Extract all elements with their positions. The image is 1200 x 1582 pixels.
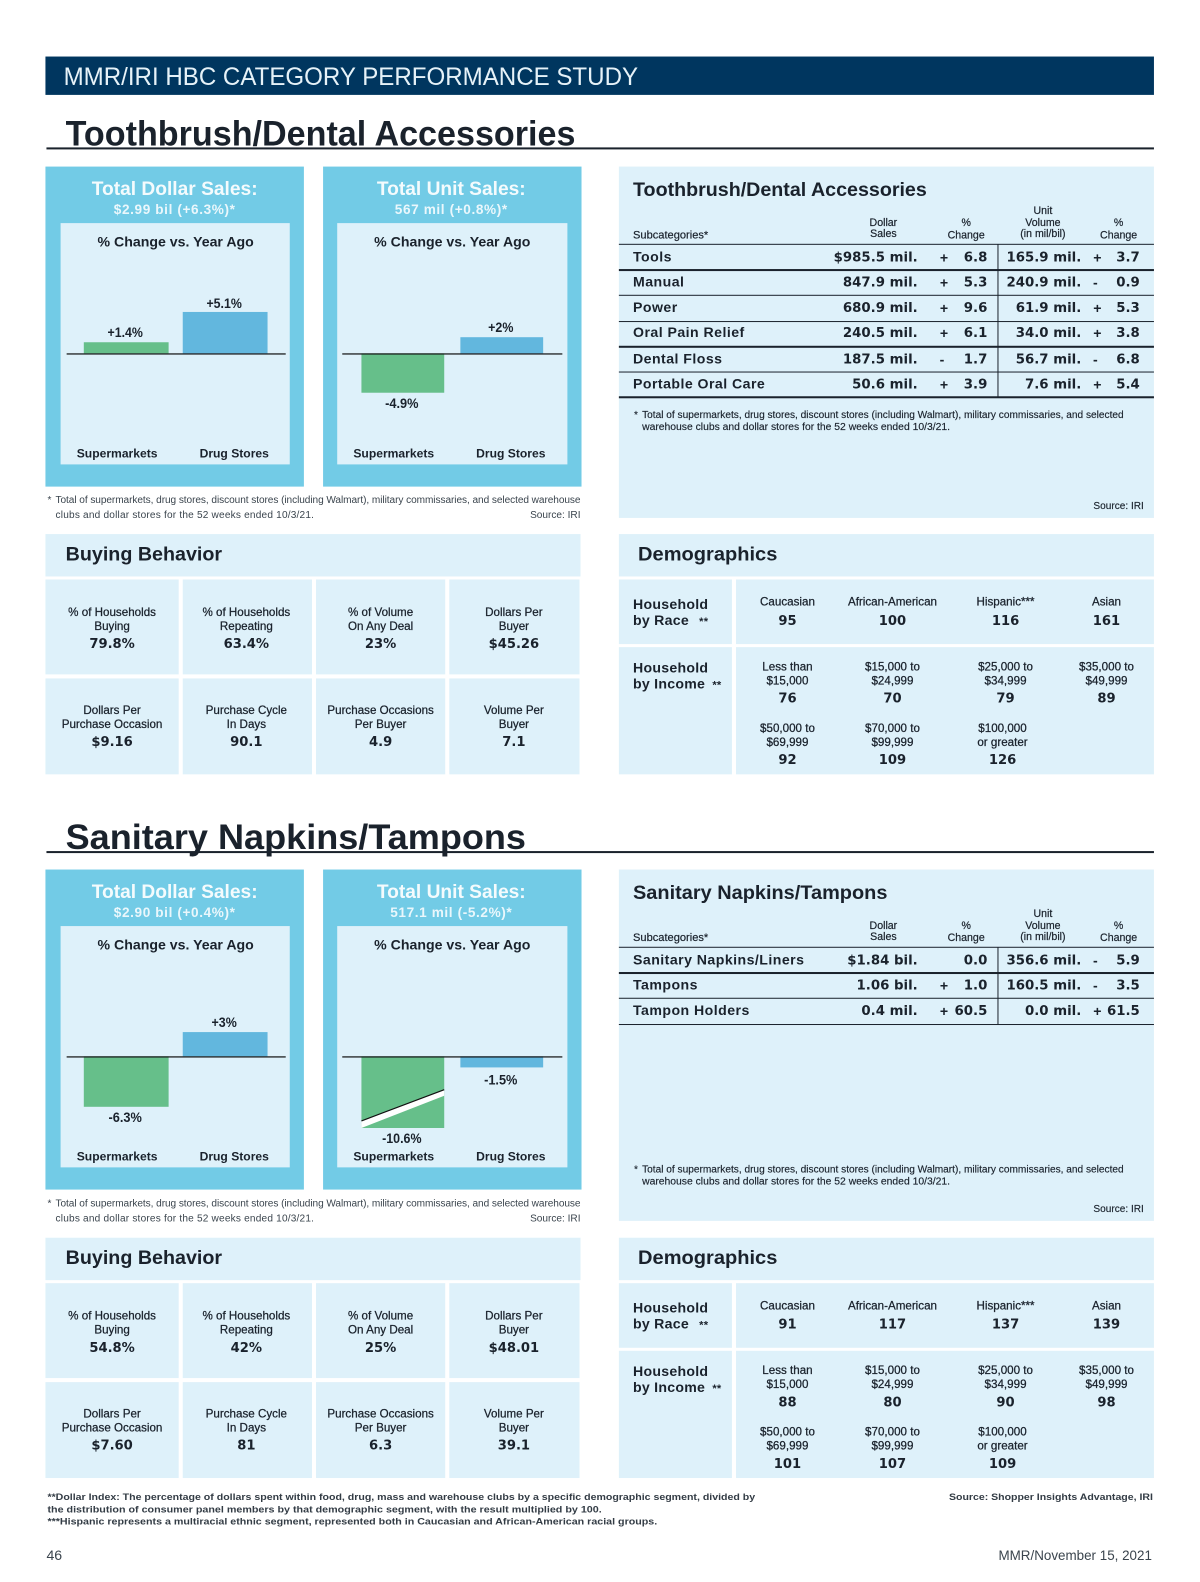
panel: buying behavior: In Days xyxy=(227,718,266,731)
panel: demographics: 89 xyxy=(1097,692,1116,707)
panel: buying behavior: Purchase Occasion xyxy=(62,718,162,731)
panel: buying behavior: Dollars Per xyxy=(83,1407,141,1420)
panel: demographics: $35,000 to xyxy=(1079,660,1134,673)
panel: buying behavior xyxy=(45,1238,581,1478)
panel: demographics: Less than xyxy=(762,660,813,673)
panel: demographics: $15,000 xyxy=(766,674,808,687)
panel: buying behavior: 4.9 xyxy=(369,735,392,750)
table panel: subcategories: + xyxy=(940,325,948,341)
footnotes: dollar index and Hispanic definition: ***Hispanic represents a multiracial ethnic segment, represented both in Caucasian and African-American racial groups. xyxy=(47,1516,657,1527)
table panel: subcategories xyxy=(619,870,1154,1221)
table panel: subcategories: Tools xyxy=(633,248,672,264)
footnote: sales panels: Source: IRI xyxy=(530,510,581,521)
panel: total dollar sales xyxy=(45,870,304,1190)
bar chart: dollar sales change: +1.4% xyxy=(108,325,143,340)
panel: demographics: Asian xyxy=(1092,1299,1121,1312)
table panel: subcategories: % xyxy=(961,217,971,229)
table panel: subcategories: 9.6 xyxy=(964,301,987,316)
panel: demographics: Hispanic*** xyxy=(977,1299,1035,1312)
panel: buying behavior: 54.8% xyxy=(89,1341,135,1356)
source credit: Source: Shopper Insights Advantage, IRI xyxy=(949,1492,1153,1503)
bar chart: unit sales change: -4.9% xyxy=(385,396,418,411)
panel: demographics: 100 xyxy=(879,614,906,629)
panel: demographics: 92 xyxy=(778,753,797,768)
panel: buying behavior: % of Households xyxy=(68,1310,156,1323)
panel: demographics: $70,000 to xyxy=(865,1426,920,1439)
table panel: subcategories: 3.9 xyxy=(964,378,987,393)
table panel: subcategories: + xyxy=(940,377,948,393)
panel: buying behavior: On Any Deal xyxy=(348,1324,413,1337)
table panel: subcategories: + xyxy=(1093,1003,1102,1019)
panel: demographics: $100,000 xyxy=(978,722,1027,735)
panel: buying behavior: On Any Deal xyxy=(348,620,413,633)
table panel: subcategories: + xyxy=(940,275,948,291)
table panel: subcategories: + xyxy=(940,300,948,316)
table panel: subcategories: 34.0 mil. xyxy=(1016,326,1081,341)
table panel: subcategories: Sanitary Napkins/Liners xyxy=(633,951,804,967)
table panel: subcategories: $985.5 mil. xyxy=(834,250,918,265)
panel: demographics: Household xyxy=(633,1363,708,1379)
panel: demographics: 116 xyxy=(992,614,1019,629)
table panel: subcategories: Manual xyxy=(633,274,684,290)
panel: demographics: $69,999 xyxy=(766,1440,808,1453)
table panel: subcategories: Total of supermarkets, drug stores, discount stores (including Walmart), military commissaries, and selected xyxy=(642,410,1124,421)
panel: total dollar sales: Total Dollar Sales: xyxy=(92,882,258,903)
table panel: subcategories: 0.0 xyxy=(964,953,987,968)
table panel: subcategories: Volume xyxy=(1025,920,1061,932)
table panel: subcategories: Portable Oral Care xyxy=(633,376,765,392)
table panel: subcategories: 0.0 mil. xyxy=(1025,1004,1081,1019)
panel: buying behavior: Purchase Occasions xyxy=(327,1407,434,1420)
bar chart: unit sales change: Drug Stores xyxy=(476,446,546,460)
footnote: sales panels: Total of supermarkets, drug stores, discount stores (including Walmart), military commissaries, and selected warehouse xyxy=(56,1198,581,1209)
bar chart: dollar sales change: Supermarkets xyxy=(77,1149,158,1163)
table panel: subcategories: 160.5 mil. xyxy=(1006,979,1081,994)
panel: buying behavior: 6.3 xyxy=(369,1439,392,1454)
panel: buying behavior: Per Buyer xyxy=(355,718,407,731)
table panel: subcategories: 6.1 xyxy=(964,326,987,341)
table panel: subcategories: Dollar xyxy=(870,920,898,932)
panel: demographics: $99,999 xyxy=(871,1440,913,1453)
panel: demographics: 109 xyxy=(879,753,906,768)
bar chart: unit sales change: Supermarkets xyxy=(353,446,434,460)
footnote: sales panels: * xyxy=(47,495,51,506)
table panel: subcategories: * xyxy=(634,410,638,421)
panel: buying behavior: Buyer xyxy=(499,620,529,633)
bar chart: dollar sales change xyxy=(67,1015,286,1163)
panel: demographics: $50,000 to xyxy=(760,1426,815,1439)
panel: buying behavior: $45.26 xyxy=(489,637,539,652)
panel: total dollar sales: $2.99 bil (+6.3%)* xyxy=(114,202,236,217)
panel: buying behavior: Buying Behavior xyxy=(66,1248,223,1269)
footnote: sales panels: Source: IRI xyxy=(530,1214,581,1225)
panel: buying behavior: 7.1 xyxy=(502,735,526,750)
panel: buying behavior: Buying Behavior xyxy=(66,544,223,565)
table panel: subcategories: % xyxy=(1114,217,1124,229)
table panel: subcategories: 60.5 xyxy=(955,1004,987,1019)
panel: buying behavior: 90.1 xyxy=(230,735,263,750)
table panel: subcategories: 6.8 xyxy=(964,250,987,265)
panel: buying behavior: Buyer xyxy=(499,1422,529,1435)
table panel: subcategories: 7.6 mil. xyxy=(1025,378,1081,393)
panel: buying behavior: 23% xyxy=(365,637,396,652)
panel: demographics: African-American xyxy=(848,1299,937,1312)
table panel: subcategories: + xyxy=(1093,300,1102,316)
panel: demographics: $24,999 xyxy=(871,1378,913,1391)
panel: demographics: $49,999 xyxy=(1086,674,1127,687)
table panel: subcategories: Tampon Holders xyxy=(633,1002,750,1018)
panel: demographics: 90 xyxy=(996,1395,1015,1410)
bar chart: dollar sales change xyxy=(67,296,286,460)
table panel: subcategories: * xyxy=(634,1164,638,1175)
panel: total unit sales: Total Unit Sales: xyxy=(377,179,526,200)
bar chart: dollar sales change: +5.1% xyxy=(206,296,242,311)
panel: demographics: $70,000 to xyxy=(865,722,920,735)
table panel: subcategories: - xyxy=(1093,351,1098,367)
panel: demographics: $34,999 xyxy=(985,1378,1027,1391)
table panel: subcategories: 56.7 mil. xyxy=(1016,352,1081,367)
panel: buying behavior: Volume Per xyxy=(484,1407,544,1420)
table panel: subcategories: Subcategories* xyxy=(633,932,709,944)
banner xyxy=(45,57,1154,95)
table panel: subcategories: + xyxy=(940,249,948,265)
bar chart: dollar sales change: +3% xyxy=(212,1015,237,1030)
panel: buying behavior: Dollars Per xyxy=(485,606,543,619)
panel: buying behavior: Repeating xyxy=(220,1324,273,1337)
panel: demographics: by Race ** xyxy=(633,1316,709,1332)
panel: demographics: 95 xyxy=(778,614,797,629)
table panel: subcategories: - xyxy=(1093,978,1098,994)
panel: buying behavior: 79.8% xyxy=(89,637,135,652)
table panel: subcategories: 3.5 xyxy=(1116,979,1140,994)
table panel: subcategories: $1.84 bil. xyxy=(847,953,918,968)
table panel: subcategories: 187.5 mil. xyxy=(843,352,918,367)
table panel: subcategories: 240.9 mil. xyxy=(1006,276,1081,291)
panel: demographics: Asian xyxy=(1092,596,1121,609)
panel: buying behavior: Buying xyxy=(94,1324,130,1337)
table panel: subcategories: Tampons xyxy=(633,977,698,993)
panel: buying behavior: Purchase Cycle xyxy=(206,1407,287,1420)
table panel: subcategories: - xyxy=(1093,952,1098,968)
panel: demographics: 88 xyxy=(778,1395,797,1410)
panel: demographics: by Income ** xyxy=(633,676,722,692)
publication date: MMR/November 15, 2021 xyxy=(998,1547,1152,1563)
panel: total dollar sales: Total Dollar Sales: xyxy=(92,179,258,200)
table panel: subcategories: 1.06 bil. xyxy=(857,979,918,994)
panel: demographics xyxy=(619,534,1154,774)
bar chart: unit sales change xyxy=(342,320,562,460)
table panel: subcategories: 1.7 xyxy=(964,352,987,367)
panel: demographics: or greater xyxy=(977,736,1028,749)
panel: demographics: Caucasian xyxy=(760,596,815,609)
panel: demographics: $49,999 xyxy=(1086,1378,1127,1391)
footnotes: dollar index and Hispanic definition: **Dollar Index: The percentage of dollars spent within food, drug, mass and warehouse clubs by a specific demographic segment, divided by xyxy=(47,1492,756,1503)
table panel: subcategories: 0.4 mil. xyxy=(861,1004,918,1019)
table panel: subcategories: 5.9 xyxy=(1116,953,1140,968)
footnotes: dollar index and Hispanic definition: the distribution of consumer panel members by that demographic segment, with the result multiplied by 100. xyxy=(47,1504,602,1515)
bar chart: unit sales change: -10.6% xyxy=(382,1131,422,1146)
table panel: subcategories: Subcategories* xyxy=(633,229,709,241)
panel: buying behavior: % of Households xyxy=(202,606,290,619)
panel: buying behavior: Purchase Occasions xyxy=(327,704,434,717)
footnote: sales panels: clubs and dollar stores for the 52 weeks ended 10/3/21. xyxy=(56,510,314,521)
panel: demographics: 76 xyxy=(778,692,797,707)
panel: demographics: $24,999 xyxy=(871,674,913,687)
panel: demographics: Household xyxy=(633,659,708,675)
table panel: subcategories: - xyxy=(940,351,945,367)
table panel: subcategories: 680.9 mil. xyxy=(843,301,918,316)
banner: MMR/IRI HBC CATEGORY PERFORMANCE STUDY xyxy=(64,63,638,91)
panel: buying behavior: % of Volume xyxy=(348,1310,413,1323)
table panel: subcategories: 1.0 xyxy=(964,979,987,994)
panel: demographics: $35,000 to xyxy=(1079,1364,1134,1377)
table panel: subcategories: Unit xyxy=(1033,908,1052,920)
table panel: subcategories: 356.6 mil. xyxy=(1006,953,1081,968)
footnotes: dollar index and Hispanic definition xyxy=(47,1492,756,1527)
section title: Toothbrush/Dental Accessories: Toothbrush/Dental Accessories xyxy=(66,114,575,153)
table panel: subcategories: (in mil/bil) xyxy=(1020,228,1066,240)
panel: demographics: 117 xyxy=(879,1318,906,1333)
panel: demographics: 101 xyxy=(774,1457,801,1472)
panel: buying behavior xyxy=(45,534,581,774)
table panel: subcategories: Unit xyxy=(1033,205,1052,217)
panel: demographics: Hispanic*** xyxy=(977,596,1035,609)
panel: demographics: $15,000 xyxy=(766,1378,808,1391)
panel: buying behavior: $7.60 xyxy=(91,1439,133,1454)
table panel: subcategories: 50.6 mil. xyxy=(852,378,918,393)
table panel: subcategories: Volume xyxy=(1025,217,1061,229)
panel: demographics: $99,999 xyxy=(871,736,913,749)
panel: buying behavior: $48.01 xyxy=(489,1341,539,1356)
panel: demographics: $34,999 xyxy=(985,674,1027,687)
panel: demographics: Caucasian xyxy=(760,1299,815,1312)
panel: demographics: $50,000 to xyxy=(760,722,815,735)
bar chart: dollar sales change: -6.3% xyxy=(109,1110,142,1125)
panel: demographics: 137 xyxy=(992,1318,1019,1333)
panel: demographics: 139 xyxy=(1093,1318,1120,1333)
table panel: subcategories: + xyxy=(940,1003,948,1019)
table panel: subcategories: + xyxy=(1093,377,1102,393)
table panel: subcategories: Change xyxy=(1100,229,1137,241)
panel: buying behavior: 42% xyxy=(231,1341,262,1356)
page number: 46 xyxy=(46,1547,62,1563)
panel: buying behavior: Repeating xyxy=(220,620,273,633)
bar chart: unit sales change: Drug Stores xyxy=(476,1149,546,1163)
panel: demographics: $15,000 to xyxy=(865,660,920,673)
panel: demographics: Demographics xyxy=(638,1248,777,1269)
panel: buying behavior: Purchase Cycle xyxy=(206,704,287,717)
table panel: subcategories: + xyxy=(940,978,948,994)
table panel: subcategories: Change xyxy=(1100,932,1137,944)
panel: demographics: 98 xyxy=(1097,1395,1116,1410)
bar chart: unit sales change xyxy=(342,1056,562,1163)
table panel: subcategories: - xyxy=(1093,275,1098,291)
panel: buying behavior: $9.16 xyxy=(91,735,133,750)
table panel: subcategories: Dental Floss xyxy=(633,350,722,366)
panel: total unit sales: 517.1 mil (-5.2%)* xyxy=(390,905,512,920)
panel: demographics: 161 xyxy=(1093,614,1120,629)
panel: buying behavior: 25% xyxy=(365,1341,396,1356)
section title: Sanitary Napkins/Tampons: Sanitary Napkins/Tampons xyxy=(66,818,526,857)
panel: demographics: $100,000 xyxy=(978,1426,1027,1439)
table panel: subcategories: 0.9 xyxy=(1116,276,1140,291)
panel: demographics: $25,000 to xyxy=(978,1364,1033,1377)
bar chart: dollar sales change: Supermarkets xyxy=(77,446,158,460)
panel: total dollar sales: $2.90 bil (+0.4%)* xyxy=(114,905,236,920)
table panel: subcategories: + xyxy=(1093,325,1102,341)
table panel: subcategories: Sales xyxy=(870,228,897,240)
table panel: subcategories: Power xyxy=(633,299,678,315)
panel: demographics: Household xyxy=(633,1299,708,1315)
table panel: subcategories: warehouse clubs and dollar stores for the 52 weeks ended 10/3/21. xyxy=(641,1177,950,1188)
panel: demographics: 107 xyxy=(879,1457,906,1472)
table panel: subcategories: % xyxy=(961,920,971,932)
panel: buying behavior: % of Households xyxy=(202,1310,290,1323)
table panel: subcategories: Oral Pain Relief xyxy=(633,324,745,340)
panel: buying behavior: % of Households xyxy=(68,606,156,619)
panel: total unit sales: % Change vs. Year Ago xyxy=(374,936,531,952)
panel: demographics: $15,000 to xyxy=(865,1364,920,1377)
table panel: subcategories: Change xyxy=(948,932,985,944)
panel: buying behavior: Buyer xyxy=(499,1324,529,1337)
table panel: subcategories: Total of supermarkets, drug stores, discount stores (including Walmart), military commissaries, and selected xyxy=(642,1164,1124,1175)
table panel: subcategories: 3.8 xyxy=(1116,326,1140,341)
panel: demographics: or greater xyxy=(977,1440,1028,1453)
panel: demographics xyxy=(619,1238,1154,1478)
panel: total unit sales xyxy=(323,870,582,1190)
table panel: subcategories: 61.9 mil. xyxy=(1016,301,1081,316)
table panel: subcategories: 61.5 xyxy=(1107,1004,1140,1019)
bar chart: dollar sales change: Drug Stores xyxy=(200,446,269,460)
panel: buying behavior: In Days xyxy=(227,1422,266,1435)
table panel: subcategories: Sales xyxy=(870,931,897,943)
panel: buying behavior: Per Buyer xyxy=(355,1422,407,1435)
panel: total dollar sales xyxy=(45,167,304,487)
panel: demographics: $69,999 xyxy=(766,736,808,749)
panel: demographics: 70 xyxy=(883,692,902,707)
footnote: sales panels: * xyxy=(47,1198,51,1209)
table panel: subcategories xyxy=(619,167,1154,518)
panel: buying behavior: Purchase Occasion xyxy=(62,1422,162,1435)
bar chart: unit sales change: Supermarkets xyxy=(353,1149,434,1163)
panel: demographics: 79 xyxy=(996,692,1015,707)
table panel: subcategories: Source: IRI xyxy=(1093,501,1144,512)
panel: total unit sales: % Change vs. Year Ago xyxy=(374,233,531,249)
table panel: subcategories: 5.3 xyxy=(1116,301,1140,316)
table panel: subcategories: warehouse clubs and dollar stores for the 52 weeks ended 10/3/21. xyxy=(641,422,950,433)
table panel: subcategories: % xyxy=(1114,920,1124,932)
panel: buying behavior: Dollars Per xyxy=(485,1310,543,1323)
table panel: subcategories: Dollar xyxy=(870,217,898,229)
panel: total dollar sales: % Change vs. Year Ago xyxy=(98,233,254,249)
footnote: sales panels: clubs and dollar stores for the 52 weeks ended 10/3/21. xyxy=(56,1214,314,1225)
panel: demographics: 91 xyxy=(778,1318,797,1333)
bar chart: unit sales change: -1.5% xyxy=(484,1073,517,1088)
panel: demographics: 126 xyxy=(989,753,1016,768)
table panel: subcategories: 165.9 mil. xyxy=(1006,250,1081,265)
panel: demographics: African-American xyxy=(848,596,937,609)
panel: total unit sales: 567 mil (+0.8%)* xyxy=(395,202,508,217)
panel: demographics: Demographics xyxy=(638,544,777,565)
panel: demographics: Household xyxy=(633,596,708,612)
table panel: subcategories: 5.3 xyxy=(964,276,987,291)
table panel: subcategories: 3.7 xyxy=(1116,250,1140,265)
panel: buying behavior: % of Volume xyxy=(348,606,413,619)
table panel: subcategories: 240.5 mil. xyxy=(843,326,918,341)
footnote: sales panels: Total of supermarkets, drug stores, discount stores (including Walmart), military commissaries, and selected warehouse xyxy=(56,495,581,506)
table panel: subcategories: Sanitary Napkins/Tampons xyxy=(633,883,887,904)
panel: buying behavior: 39.1 xyxy=(498,1439,530,1454)
footnote: sales panels xyxy=(47,1198,581,1225)
panel: buying behavior: Buyer xyxy=(499,718,529,731)
bar chart: unit sales change: +2% xyxy=(488,320,513,335)
table panel: subcategories: + xyxy=(1093,249,1102,265)
panel: total unit sales xyxy=(323,167,582,487)
table panel: subcategories: (in mil/bil) xyxy=(1020,931,1066,943)
table panel: subcategories: Change xyxy=(948,229,985,241)
panel: buying behavior: 63.4% xyxy=(224,637,269,652)
panel: demographics: 109 xyxy=(989,1457,1016,1472)
panel: total unit sales: Total Unit Sales: xyxy=(377,882,526,903)
panel: buying behavior: 81 xyxy=(237,1439,255,1454)
panel: total dollar sales: % Change vs. Year Ago xyxy=(98,936,254,952)
panel: demographics: Less than xyxy=(762,1364,813,1377)
table panel: subcategories: Toothbrush/Dental Accessories xyxy=(633,180,927,201)
panel: demographics: by Income ** xyxy=(633,1379,722,1395)
table panel: subcategories: Source: IRI xyxy=(1093,1204,1144,1215)
table panel: subcategories: 5.4 xyxy=(1116,378,1140,393)
footnote: sales panels xyxy=(47,495,581,521)
panel: demographics: $25,000 to xyxy=(978,660,1033,673)
panel: buying behavior: Dollars Per xyxy=(83,704,141,717)
table panel: subcategories: 847.9 mil. xyxy=(843,276,918,291)
panel: demographics: by Race ** xyxy=(633,612,709,628)
panel: demographics: 80 xyxy=(883,1395,902,1410)
panel: buying behavior: Buying xyxy=(94,620,130,633)
table panel: subcategories: 6.8 xyxy=(1116,352,1140,367)
panel: buying behavior: Volume Per xyxy=(484,704,544,717)
bar chart: dollar sales change: Drug Stores xyxy=(200,1149,269,1163)
